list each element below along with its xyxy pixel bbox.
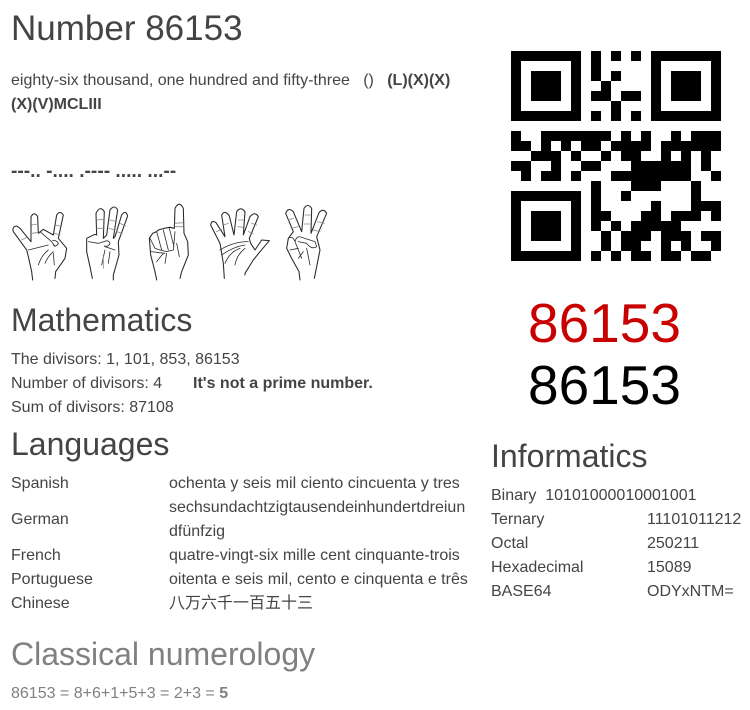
icon: sign language hands [12,204,328,280]
row: BASE64: ODYxNTM= [647,583,734,600]
icon: hand 5 [211,209,269,278]
number in words and roman numerals: (X)(V)MCLIII [11,96,102,113]
icon: hand 8 [13,212,67,280]
title: Number 86153 [11,9,243,48]
mathematics text block: It's not a prime number. [193,375,373,392]
data modules [511,51,721,261]
row: French: quatre-vingt-six mille cent cinquante-trois [169,547,460,564]
row: German [11,499,465,540]
row: Spanish: ochenta y seis mil ciento cincuenta y tres [169,475,460,492]
languages table [11,475,468,612]
large red number: 86153 [528,292,681,354]
informatics table [491,487,741,600]
heading: Mathematics: Mathematics [11,302,192,338]
row: Octal: Octal [491,535,528,552]
row: Portuguese: Portuguese [11,571,93,588]
row: Portuguese [11,571,468,588]
row: Octal: 250211 [647,535,699,552]
row: German: dfünfzig [169,523,225,540]
row: Ternary [491,511,741,528]
row: Spanish [11,475,460,492]
row: Chinese: Chinese [11,595,70,612]
row: Spanish: Spanish [11,475,69,492]
row: German: German [11,511,69,528]
row: Hexadecimal [491,559,692,576]
mathematics text block: The divisors: 1, 101, 853, 86153 [11,351,240,368]
finder patterns [511,51,721,261]
large black number: 86153 [528,354,681,416]
row: Ternary: Ternary [491,511,544,528]
row: Chinese: 八万六千一百五十三 [169,595,313,612]
row: Hexadecimal: 15089 [647,559,692,576]
row: Ternary: 11101011212 [647,511,741,528]
row: Chinese [11,594,313,612]
row: French: French [11,547,61,564]
numerology calculation: 86153 = 8+6+1+5+3 = 2+3 = 5 [11,685,228,702]
number in words and roman numerals [11,72,450,113]
icon: hand 3 [286,205,327,280]
number in words and roman numerals: eighty-six thousand, one hundred and fifty-three () (L)(X)(X) [11,72,450,89]
heading: Informatics: Informatics [491,438,647,474]
QR code [511,51,721,261]
row: Portuguese: oitenta e seis mil, cento e cinquenta e três [169,571,468,588]
mathematics text block: Sum of divisors: 87108 [11,399,174,416]
row: BASE64 [491,583,734,600]
mathematics text block: Number of divisors: 4 [11,375,162,392]
heading: Classical numerology: Classical numerology [11,636,315,672]
heading: Languages: Languages [11,426,169,462]
row: Octal [491,535,699,552]
row: Binary: Binary 10101000010001001 [491,487,697,504]
mathematics text block [11,351,373,416]
row: BASE64: BASE64 [491,583,551,600]
row: French [11,547,460,564]
row: German: sechsundachtzigtausendeinhundertdreiun [169,499,465,516]
morse code: ---.. -.... .---- ..... ...-- [11,161,176,182]
row: Hexadecimal: Hexadecimal [491,559,583,576]
icon: hand 1 [149,204,188,280]
icon: hand 6 [87,207,128,280]
